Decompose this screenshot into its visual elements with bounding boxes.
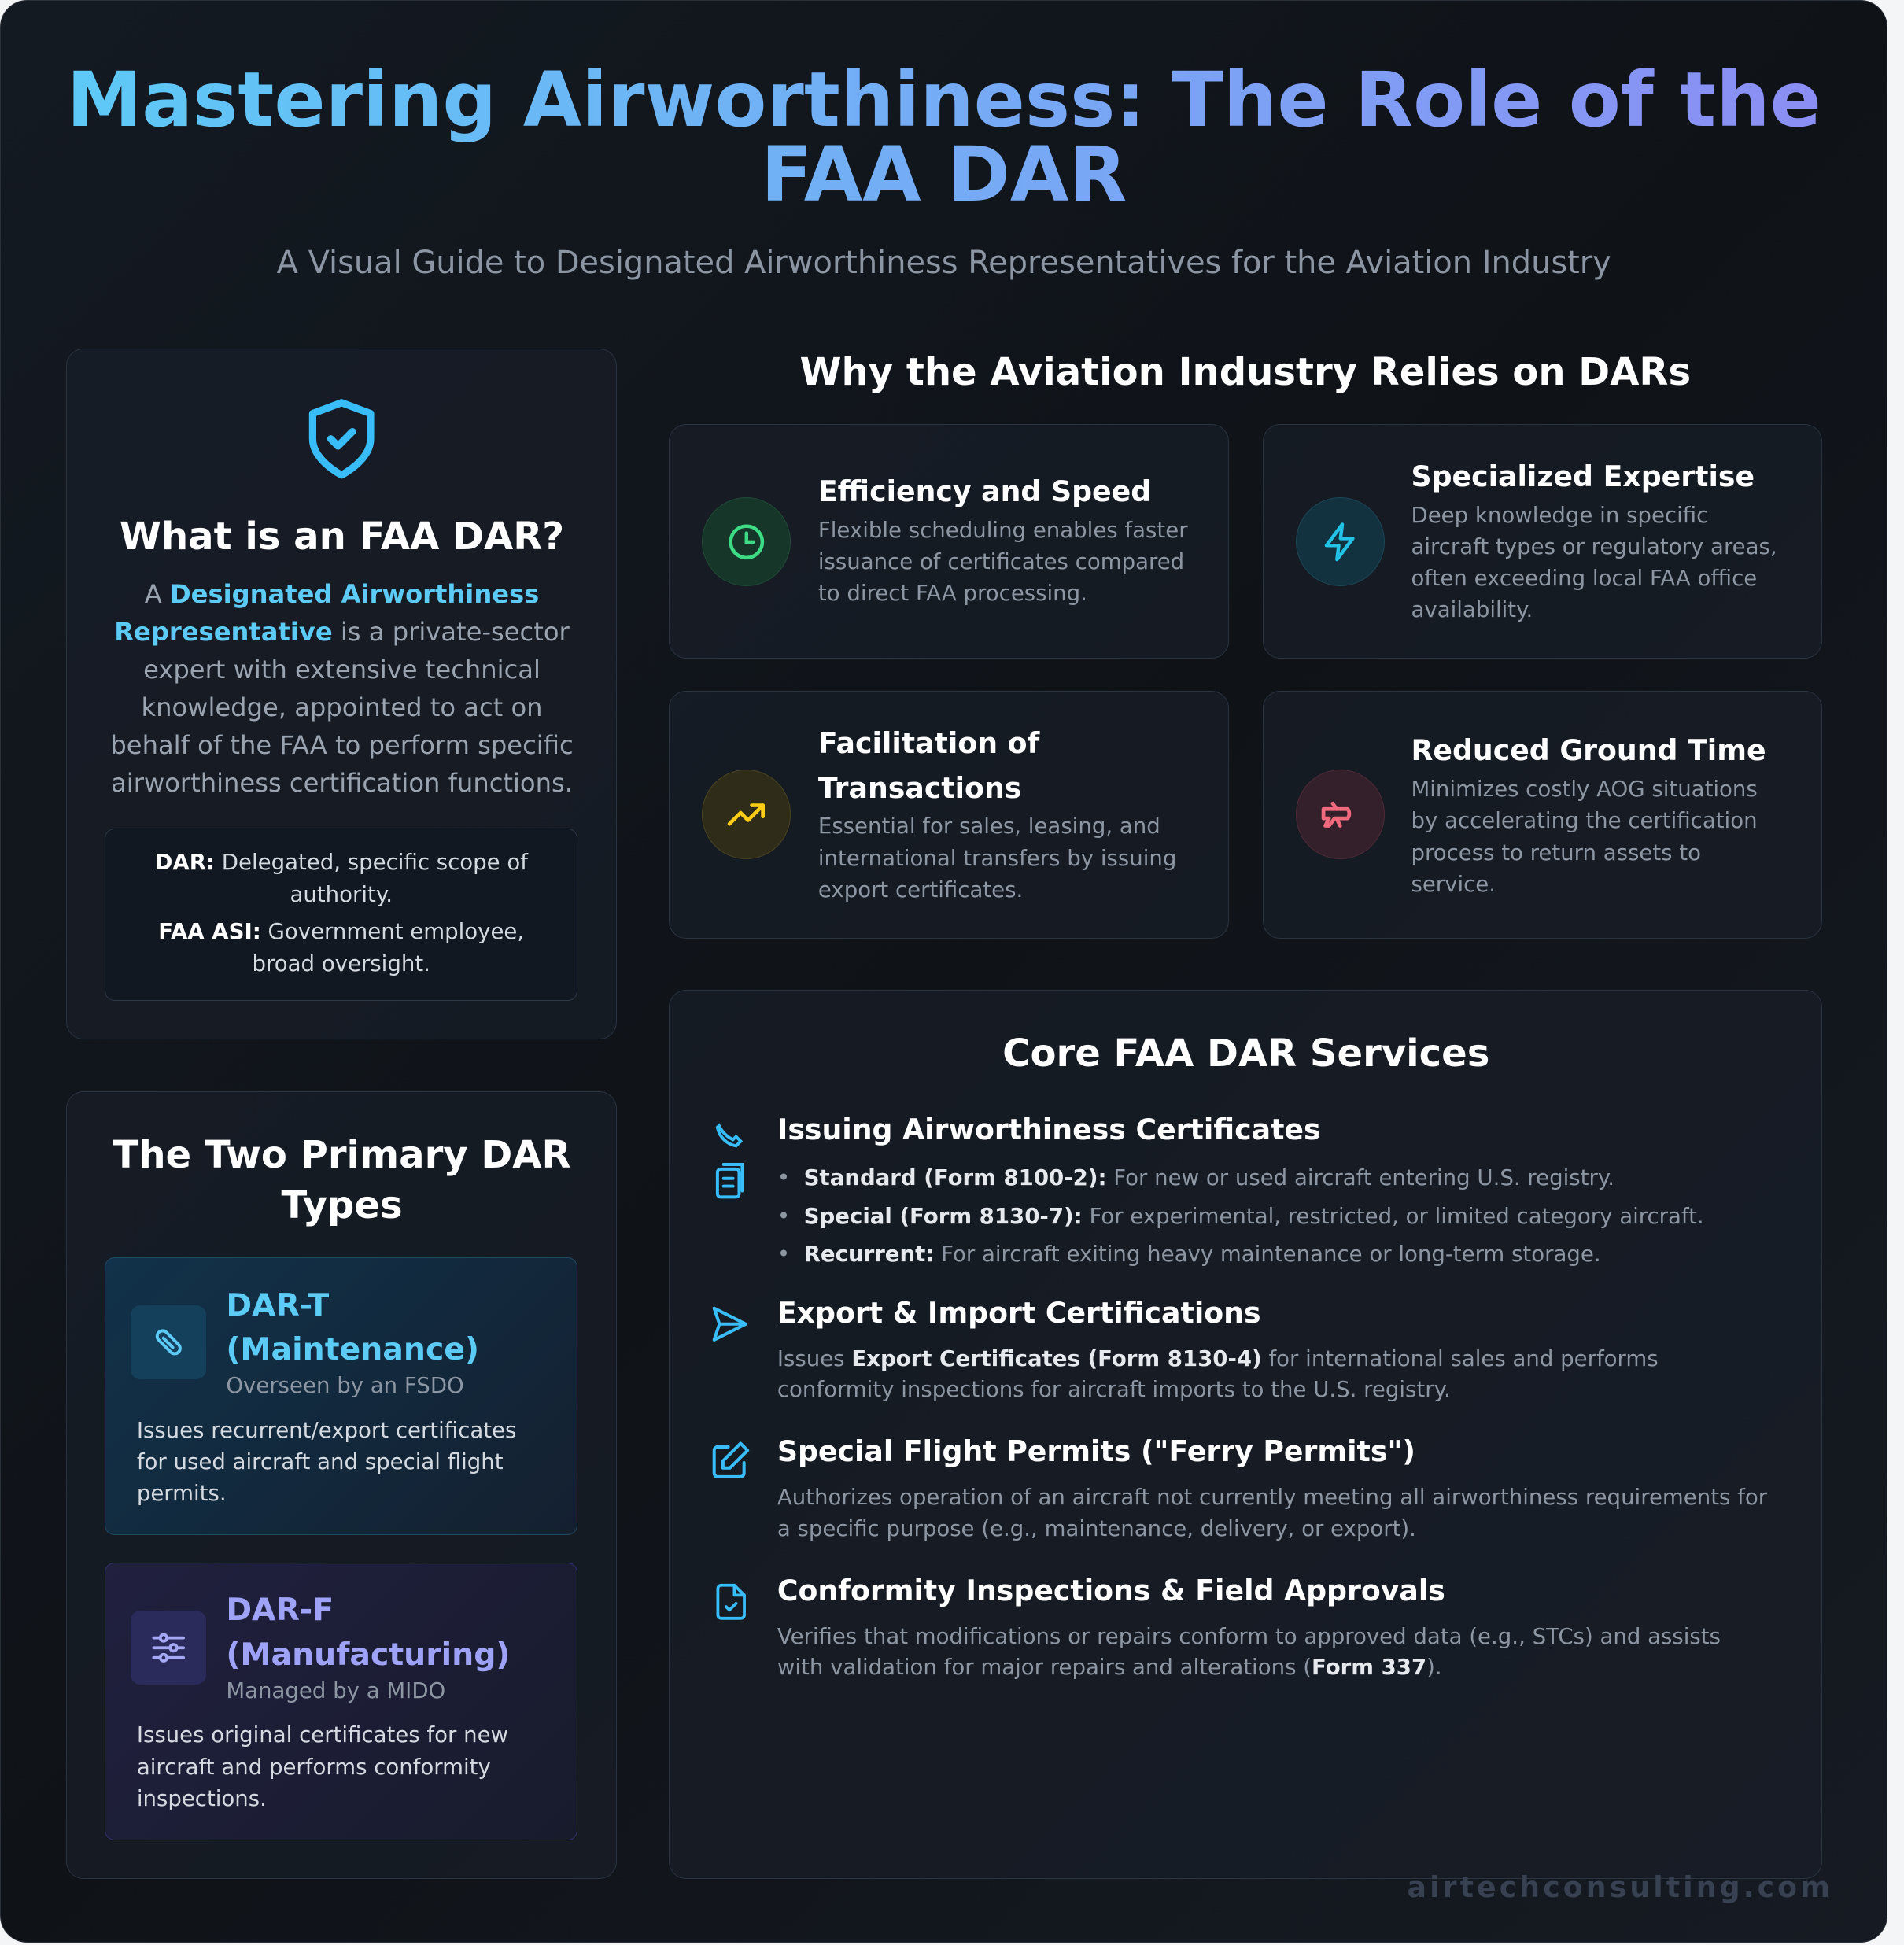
DAR-T box: Overseen by an FSDO <box>226 1372 464 1398</box>
card: reduced ground time <box>1263 691 1822 939</box>
card: facilitation of transactions: Transactions <box>818 771 1021 805</box>
card: specialized expertise <box>1263 424 1822 659</box>
service: export & import <box>713 1296 1659 1402</box>
card: reduced ground time: Reduced Ground Time <box>1411 733 1766 767</box>
service: issuing airworthiness certificates <box>716 1113 1704 1267</box>
icon: sliders <box>131 1611 206 1685</box>
icon: trending up <box>702 770 791 859</box>
card: specialized expertise: Deep knowledge in specific aircraft types or regulatory areas, often exceeding local FAA office availability. <box>1411 502 1777 622</box>
DAR-F box: Managed by a MIDO <box>226 1677 445 1703</box>
icon: clock <box>702 497 791 586</box>
DAR-F box: Issues original certificates for new aircraft and performs conformity inspections. <box>137 1722 508 1811</box>
DAR-F box: (Manufacturing) <box>226 1637 510 1673</box>
comparison box: FAA ASI: Government employee, broad oversight. <box>158 918 524 976</box>
panel: two primary DAR types <box>66 1091 617 1879</box>
heading: The Two Primary DAR <box>113 1133 571 1177</box>
icon: shield <box>308 399 375 478</box>
DAR-T box <box>105 1257 577 1535</box>
icon: pencil square <box>713 1441 749 1478</box>
card: facilitation of transactions: Facilitation of <box>818 726 1039 760</box>
card: efficiency and speed: Efficiency and Speed <box>818 474 1151 508</box>
service: issuing airworthiness certificates: • Special (Form 8130-7): For experimental, restricted, or limited category aircraft. <box>777 1203 1704 1229</box>
service: export & import: Issues Export Certificates (Form 8130-4) for international sales and performs conformity inspections for aircraft imports to the U.S. registry. <box>777 1345 1659 1402</box>
DAR-T box: DAR-T <box>226 1287 329 1323</box>
heading: Types <box>281 1183 403 1227</box>
service: issuing airworthiness certificates: • Standard (Form 8100-2): For new or used aircraft entering U.S. registry. <box>777 1164 1614 1190</box>
icon: clipboard <box>716 1123 744 1199</box>
icon: wrench <box>131 1305 206 1379</box>
definition paragraph: A Designated Airworthiness Representative is a private-sector expert with extensive technical knowledge, appointed to act on behalf of the FAA to perform specific airworthiness certification functions. <box>110 579 574 798</box>
card: specialized expertise: Specialized Expertise <box>1411 459 1755 493</box>
icon: lightning <box>1296 497 1385 586</box>
service: conformity inspections: Conformity Inspections & Field Approvals <box>777 1574 1445 1607</box>
title <box>0 63 1887 212</box>
panel: core FAA DAR services <box>669 990 1822 1879</box>
service: issuing airworthiness certificates: • Recurrent: For aircraft exiting heavy maintenance or long-term storage. <box>777 1241 1601 1267</box>
card: facilitation of transactions: Essential for sales, leasing, and international transfers by issuing export certificates. <box>818 813 1176 902</box>
card: reduced ground time: Minimizes costly AOG situations by accelerating the certification process to return assets to service. <box>1411 776 1758 897</box>
comparison box: DAR: Delegated, specific scope of authority. <box>154 849 528 907</box>
service: special flight permits: Special Flight Permits ("Ferry Permits") <box>777 1434 1415 1468</box>
service: conformity inspections: Verifies that modifications or repairs conform to approved data (e.g., STCs) and assists with validation for major repairs and alterations (Form 337). <box>777 1623 1721 1680</box>
comparison box <box>105 828 577 1001</box>
icon: file check <box>716 1583 746 1620</box>
service: conformity inspections <box>716 1574 1721 1680</box>
service: special flight permits: Authorizes operation of an aircraft not currently meeting all airworthiness requirements for a specific purpose (e.g., maintenance, delivery, or export). <box>777 1484 1767 1541</box>
title: FAA DAR <box>761 131 1127 219</box>
heading: why the industry relies on DARs: Why the Aviation Industry Relies on DARs <box>799 350 1691 394</box>
icon: plane <box>1296 770 1385 859</box>
DAR-T box: Issues recurrent/export certificates for used aircraft and special flight permits. <box>137 1417 516 1506</box>
DAR-F box: DAR-F <box>226 1592 334 1628</box>
subtitle: A Visual Guide to Designated Airworthiness Representatives for the Aviation Industry <box>277 245 1611 281</box>
DAR-T box: (Maintenance) <box>226 1331 479 1367</box>
icon: send <box>713 1306 747 1342</box>
title: Mastering Airworthiness: The Role of the <box>67 56 1821 144</box>
panel: what is an FAA DAR <box>66 349 617 1039</box>
card: facilitation of transactions <box>669 691 1229 939</box>
heading: Core FAA DAR Services <box>1002 1032 1489 1076</box>
service: export & import: Export & Import Certifications <box>777 1296 1261 1330</box>
service: special flight permits <box>713 1434 1767 1541</box>
card: efficiency and speed: Flexible scheduling enables faster issuance of certificates compared to direct FAA processing. <box>818 517 1188 606</box>
DAR-F box <box>105 1563 577 1840</box>
footer: website: airtechconsulting.com <box>1408 1870 1833 1904</box>
heading: What is an FAA DAR? <box>120 515 564 559</box>
heading <box>113 1133 571 1227</box>
card: efficiency and speed <box>669 424 1229 659</box>
service: issuing airworthiness certificates: Issuing Airworthiness Certificates <box>777 1113 1321 1146</box>
